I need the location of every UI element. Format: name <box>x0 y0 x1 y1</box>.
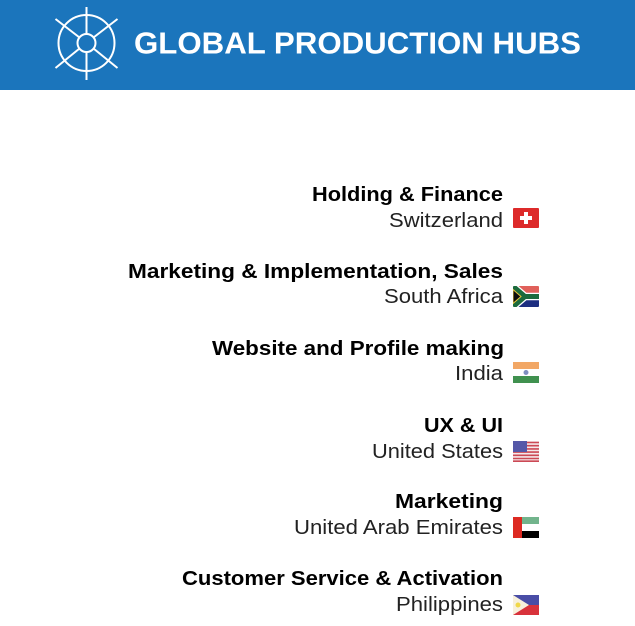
icon: Philippine flag <box>513 595 539 615</box>
header banner <box>0 0 635 90</box>
row: Switzerland: Holding & Finance <box>312 183 503 206</box>
row: United Arab Emirates <box>294 490 539 539</box>
row: South Africa: Marketing & Implementation, Sales <box>128 260 503 283</box>
row: India: India <box>455 362 504 385</box>
row: Switzerland <box>312 183 539 232</box>
icon: South African flag <box>513 286 539 307</box>
row: Philippines: Customer Service & Activation <box>182 567 503 590</box>
row: South Africa <box>130 263 539 307</box>
row: United Arab Emirates: Marketing <box>395 490 503 513</box>
row: United States <box>372 414 539 463</box>
icon: Indian flag <box>513 362 539 383</box>
row: India: Website and Profile making <box>212 337 504 360</box>
row: Philippines: Philippines <box>396 593 503 616</box>
title: GLOBAL PRODUCTION HUBS <box>134 26 581 60</box>
row: Philippines <box>182 567 539 616</box>
row: United States: UX & UI <box>424 414 503 437</box>
row: India <box>212 337 539 385</box>
row: South Africa: South Africa <box>384 285 504 308</box>
icon: Swiss flag <box>513 208 539 228</box>
row: Switzerland: Switzerland <box>389 209 503 232</box>
icon: ship wheel <box>56 7 118 80</box>
icon: US flag <box>513 441 539 462</box>
row: United States: United States <box>372 440 503 463</box>
icon: UAE flag <box>513 517 539 538</box>
row: United Arab Emirates: United Arab Emirates <box>294 516 503 539</box>
